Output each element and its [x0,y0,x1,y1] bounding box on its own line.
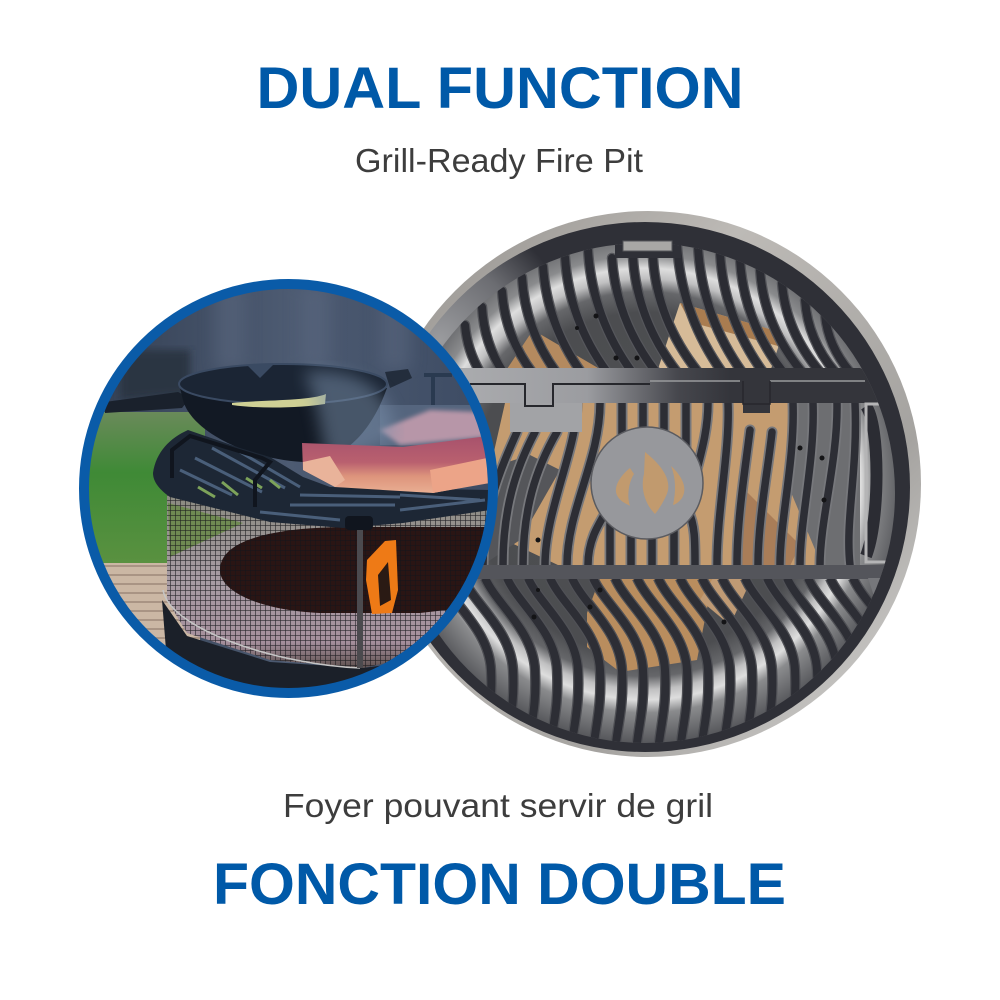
inset circle photo: grill in use [80,280,500,700]
handle on plate [172,436,270,507]
steel rim [375,211,921,757]
bottom wave slats [458,579,872,743]
top slats [465,244,850,372]
fire flame [366,540,398,614]
french title: FONCTION DOUBLE [213,852,786,917]
lower right light corner [868,578,880,594]
side handle [860,402,886,564]
cast iron skillet [105,364,412,462]
green grass [80,412,205,564]
top grate band with notches [460,368,878,413]
vent holes [532,314,826,624]
subtitle: Grill-Ready Fire Pit: Grill-Ready Fire Pit [355,142,643,179]
top steel tab [623,241,672,251]
photo contents [80,280,500,700]
rim line of drum [163,590,360,668]
grill grate top-down photo [424,211,921,757]
flame cutouts [643,452,668,514]
steel bowl interior [439,244,895,743]
latch [345,516,373,530]
smoke [300,366,398,446]
band groove lines [470,381,865,406]
top handle slot [615,244,678,258]
grate opening contents [439,244,895,743]
infographic canvas [79,67,921,904]
black base drum [162,600,380,688]
back steak [380,410,487,445]
wooden deck [104,563,200,646]
dark outer grate ring [380,222,910,752]
french subtitle: Foyer pouvant servir de gril [283,787,713,824]
grill plate [153,430,490,528]
front steak [302,437,490,493]
title: DUAL FUNCTION: DUAL FUNCTION [256,56,744,121]
lighter block left of medallion [510,403,582,432]
support post [357,530,363,668]
back handle [424,375,452,405]
central flame medallion [591,427,703,539]
middle slats [483,403,855,565]
back grate and steak haze [380,405,490,445]
mesh cylinder [167,495,490,668]
firewood logs [483,303,860,672]
blue ring border [84,284,493,693]
fence background [104,289,488,668]
bottom grate band [478,565,884,579]
